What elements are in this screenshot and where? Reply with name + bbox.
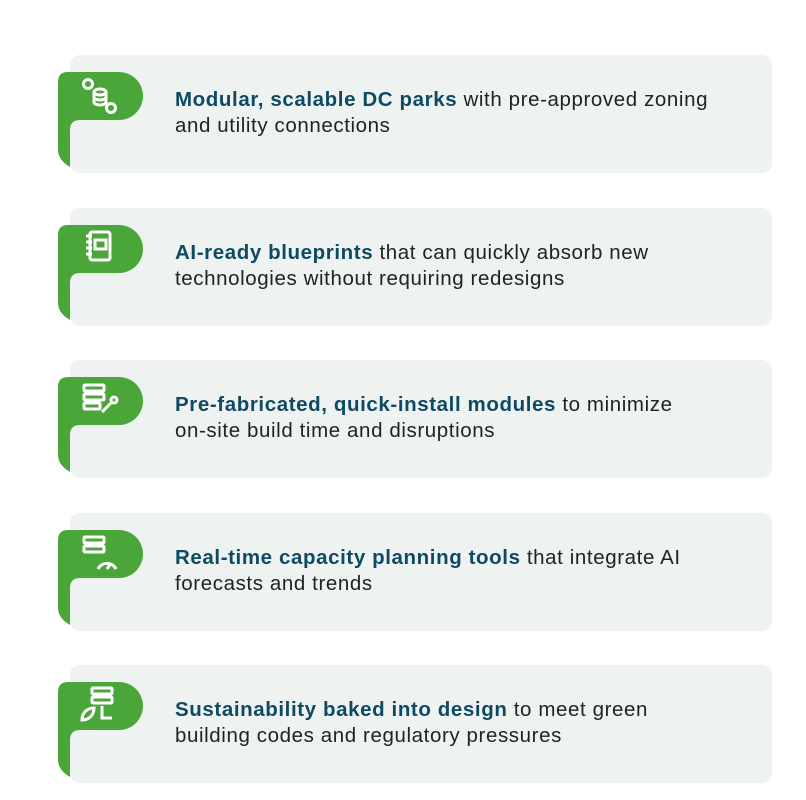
icon tab: server and wrench bbox=[58, 377, 143, 472]
card 5: sustainability bbox=[58, 665, 772, 783]
card 1: modular DC parks bbox=[58, 55, 772, 173]
text: Pre-fabricated, quick-install modules to minimize on-site build time and disruptions bbox=[175, 393, 673, 442]
text: Real-time capacity planning tools that integrate AI forecasts and trends bbox=[175, 546, 681, 595]
icon tab: server and gauge bbox=[58, 530, 143, 625]
card 4: capacity planning bbox=[58, 513, 772, 631]
card 3: pre-fabricated modules bbox=[58, 360, 772, 478]
text: AI-ready blueprints that can quickly absorb new technologies without requiring redesigns bbox=[175, 241, 649, 290]
text: Modular, scalable DC parks with pre-approved zoning and utility connections bbox=[175, 88, 708, 137]
icon tab: gears and database bbox=[58, 72, 143, 167]
text: Sustainability baked into design to meet green building codes and regulatory pressures bbox=[175, 698, 648, 747]
card 2: AI-ready blueprints bbox=[58, 208, 772, 326]
icon tab: server and leaf bbox=[58, 682, 143, 777]
icon tab: AI notebook bbox=[58, 225, 143, 320]
